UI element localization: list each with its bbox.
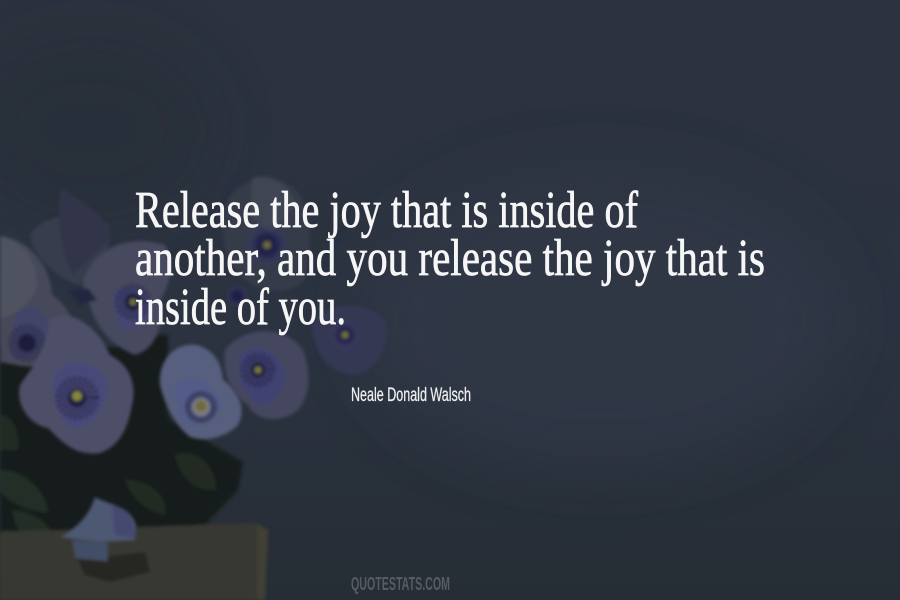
pansy far right [312, 306, 387, 375]
quote line 1: Release the joy that is inside of [135, 182, 639, 239]
illustration: potted pansies [0, 177, 387, 600]
author: Neale Donald Walsch [351, 385, 471, 406]
faded flower top centre [222, 177, 310, 291]
faded flower upper left [30, 188, 110, 285]
pansy lower left, large [19, 315, 134, 454]
pansy right [224, 331, 309, 419]
pansy left edge [0, 236, 74, 367]
small dark eye behind text [225, 284, 249, 308]
quote line 3: inside of you. [135, 279, 346, 336]
pansy upper middle [68, 241, 170, 355]
pot [0, 523, 268, 600]
drooping blossom [60, 497, 136, 562]
pansy centre, bright blue [160, 345, 242, 439]
quote text [135, 182, 765, 336]
watermark: QUOTESTATS.COM [351, 574, 450, 594]
foliage [0, 335, 243, 552]
